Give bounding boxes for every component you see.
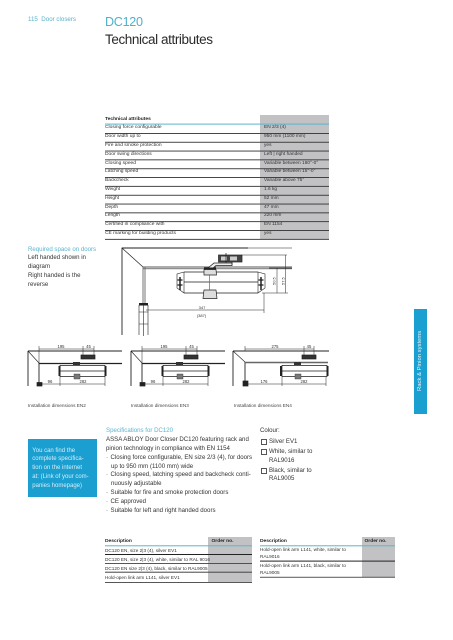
caption: EN3: Installation dimensions EN3 [131,403,189,408]
text block: required space on doors: Required space on doors [28,246,96,253]
diagram: installation EN3: 96 [151,379,156,384]
text block: colour options: RAL9005 [269,475,294,482]
diagram: installation EN4: 275 [272,344,279,349]
table: technical attributes: 220 mm [264,213,281,218]
text block: colour options [260,427,312,482]
callout: find specification on the internet: complete specifica- [32,456,84,462]
table: order right: Hold-open link arm L141, black, similar to [260,563,346,568]
diagram: installation EN4 [232,344,329,386]
table: technical attributes: 950 mm (1100 mm) [264,134,306,139]
text block: specifications for DC120 [106,427,252,514]
text block: required space on doors: Right handed is the [28,272,81,279]
title: Technical attributes: Technical attributes [105,32,213,47]
text block: specifications for DC120: · [106,489,108,496]
diagram: main door closer drawing: 57.5 [280,276,286,285]
text block: specifications for DC120: Closing speed, latching speed and backcheck conti- [110,471,251,478]
table: order right: Order no. [364,538,387,544]
text block: specifications for DC120: Suitable for fire and smoke protection doors [110,489,228,496]
text block: specifications for DC120: · [106,507,108,514]
table: technical attributes: Variable above 75° [264,178,304,183]
text block: specifications for DC120: nuously adjustable [111,480,161,487]
table: technical attributes: yes [264,231,271,236]
text block: colour options: Colour: [260,427,280,434]
text block: specifications for DC120: Specifications for DC120 [106,427,173,434]
diagram: installation EN3: 195 [160,344,168,349]
diagram: installation EN2: 45 [86,344,91,349]
table: order left: Description [105,538,132,544]
diagram: installation EN3: 282 [182,379,190,384]
text block: specifications for DC120: · [106,498,108,505]
diagram: installation EN3 [130,344,225,386]
table: order right [260,537,395,578]
callout: find specification on the internet: tion on the internet [32,465,82,471]
table: technical attributes: Fire and smoke protection [105,143,162,148]
diagram: installation EN2 [28,344,122,386]
closer body [184,272,258,293]
table: technical attributes: Depth [105,205,118,210]
text block: colour options: RAL9016 [269,457,294,464]
callout: find specification on the internet: You can find the [32,448,75,454]
caption: EN4: Installation dimensions EN4 [234,403,292,408]
text block: specifications for DC120: · [106,454,108,461]
table: technical attributes: EN 1154 [264,222,282,227]
table: order left: Order no. [212,538,234,544]
table: technical attributes: Length [105,213,120,218]
text block: specifications for DC120: pinion technology in compliance with EN 1154 [106,445,230,452]
text block: specifications for DC120: Suitable for left and right handed doors [110,507,216,514]
diagram: installation EN2: 195 [58,344,65,349]
page header: section label: 115 Door closers [28,16,76,23]
table: technical attributes: Latching speed [105,169,138,174]
table: order left [105,537,252,583]
table: technical attributes: 52 mm [264,196,279,201]
text block: required space on doors: Left handed shown in [28,254,86,261]
callout: find specification on the internet: panies homepage) [32,483,82,489]
caption: EN2: Installation dimensions EN2 [28,403,86,408]
text block: required space on doors: reverse [28,281,48,288]
side tab: Rack & Pinion systems: Rack & Pinion systems [417,331,423,391]
table: technical attributes: Technical attributes [105,117,151,122]
text block: specifications for DC120: Closing force configurable, EN size 2/3 (4), for doors [110,454,252,461]
diagram: installation EN4: 176 [260,379,268,384]
table: technical attributes: Left | right handed [264,152,303,157]
diagram: installation EN2: 96 [48,379,53,384]
table: technical attributes: 47 mm [264,205,279,210]
text block: specifications for DC120: · [106,471,108,478]
table: technical attributes: Height [105,196,119,201]
side tab: Rack & Pinion systems [414,309,427,414]
text block: required space on doors: diagram [28,263,50,270]
table: order left: Hold-open link arm L141, silver EV1 [105,575,180,580]
diagram: main door closer drawing [122,248,292,336]
text block: colour options: Silver EV1 [269,438,297,445]
text block: specifications for DC120: up to 950 mm (1100 mm) wide [111,463,193,470]
table: technical attributes: Variable between 180°-0° [264,161,318,166]
table: order right: RAL9005 [260,570,280,575]
table: technical attributes: Weight [105,187,120,192]
text block: colour options: White, similar to [269,448,312,455]
callout: find specification on the internet: at: (Link of your com- [32,474,89,480]
diagram: main door closer drawing: (387) [197,313,207,318]
table: technical attributes: Backcheck [105,178,129,183]
diagram: main door closer drawing: 50.5 [272,276,276,285]
text block: specifications for DC120: CE approved [110,498,146,505]
diagram: main door closer drawing: 347 [199,305,206,310]
table: technical attributes [105,115,329,240]
hold-open bracket [218,255,242,262]
table: order left: DC120 EN, size 2|3 (4), silver EV1 [105,548,177,553]
table: technical attributes: Closing speed [105,161,136,166]
title: DC120: DC120 [105,15,143,29]
table: technical attributes: Door width up to [105,134,141,139]
table: technical attributes: Door swing directions [105,152,152,157]
table: technical attributes: yes [264,143,271,148]
table: order right: Description [260,538,287,544]
table: technical attributes: Certified in compliance with [105,222,165,227]
diagram: installation EN2: 282 [80,379,87,384]
table: technical attributes: CE marking for building products [105,231,176,236]
diagram: installation EN4: 45 [307,344,312,349]
table: order right: RAL9016 [260,554,280,559]
callout: find specification on the internet [28,439,97,497]
table: order left: DC120 EN, size 2|3 (4), white, similar to RAL 9016 [105,557,210,562]
table: order right: Hold-open link arm L141, white, similar to [260,546,346,552]
text block: specifications for DC120: ASSA ABLOY Door Closer DC120 featuring rack and [106,436,249,443]
table: technical attributes: Variable between 15°-0° [264,169,315,174]
dimension lines [146,255,292,313]
text block: required space on doors [28,246,96,288]
diagram: installation EN4: 282 [300,379,308,384]
table: technical attributes: Closing force configurable [105,125,162,130]
text block: colour options: Black, similar to [269,467,312,474]
table: technical attributes: 1.6 kg [264,187,277,192]
table: technical attributes: EN 2/3 (4) [264,125,286,130]
diagram: installation EN3: 45 [189,344,194,349]
table: order left: DC120 EN size 2|3 (4), black, similar to RAL9005 [105,566,208,571]
